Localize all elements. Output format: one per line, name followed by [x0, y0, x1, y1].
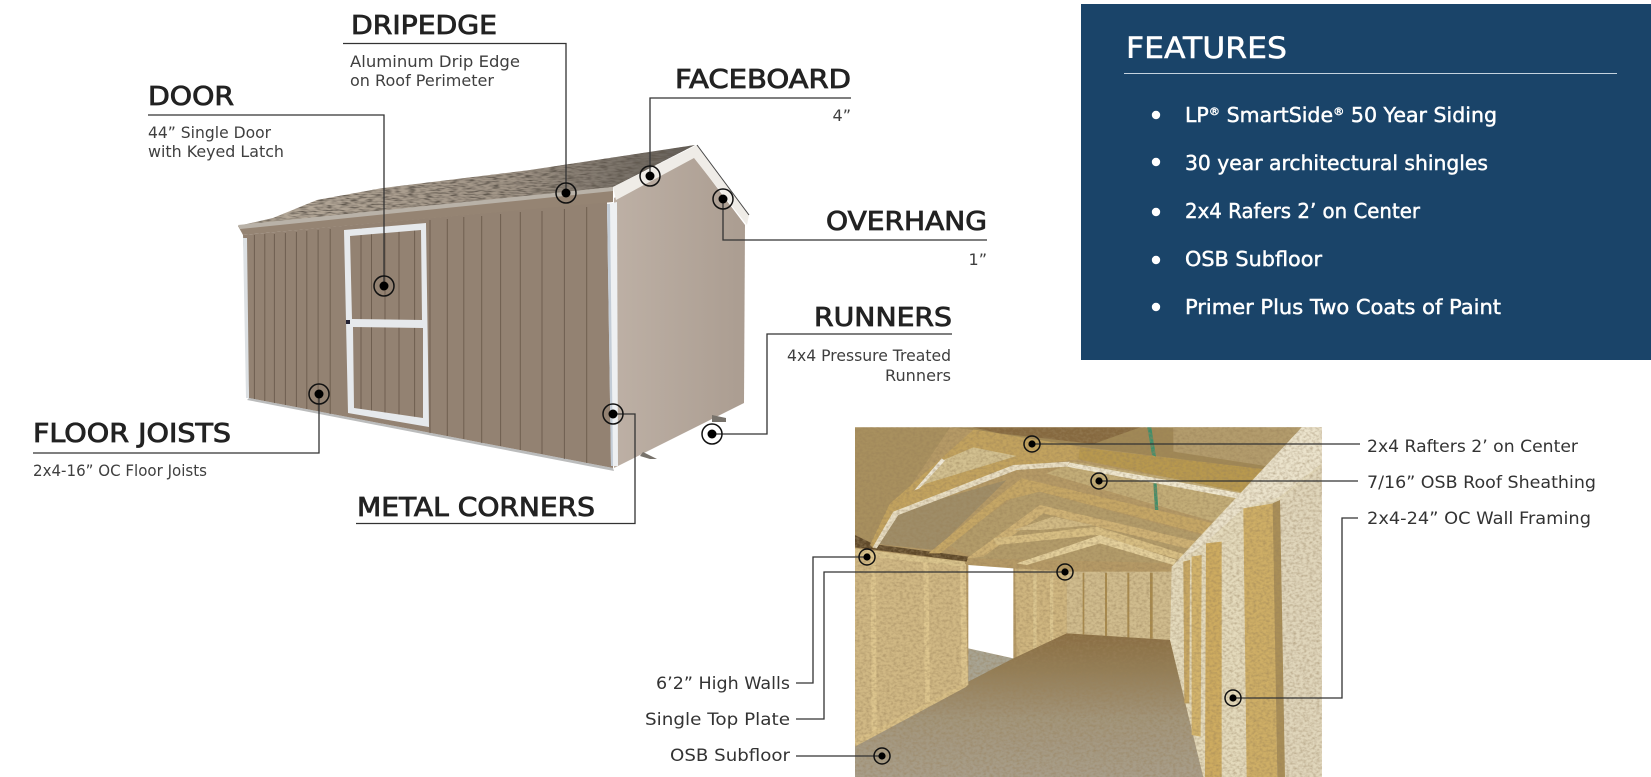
feature list: 50 Year Siding: [1344, 103, 1497, 127]
feature list: SmartSide: [1220, 103, 1333, 127]
photo callout: wall framing: 2x4-24” OC Wall Framing: [1367, 509, 1591, 529]
callout: floor joists: 2x4-16” OC Floor Joists: [33, 461, 207, 480]
callout: door: 44” Single Door: [148, 123, 271, 142]
feature list: ®: [1209, 105, 1220, 118]
corner and gable trim: [607, 202, 618, 466]
photo callout: wall framing: [1225, 509, 1591, 706]
left wall: [855, 548, 968, 745]
roof sheathing: [855, 427, 950, 545]
shed side wall: [614, 157, 745, 468]
photo callout: top plate: Single Top Plate: [645, 710, 790, 730]
callout: dripedge: [343, 11, 576, 203]
callout: door: with Keyed Latch: [148, 142, 284, 161]
photo callout: rafters: 2x4 Rafters 2’ on Center: [1367, 437, 1578, 457]
callout: runners: 4x4 Pressure Treated: [787, 346, 951, 365]
shed illustration: [238, 145, 749, 471]
callout: overhang: [713, 189, 987, 269]
callout: floor joists: [33, 384, 329, 480]
callout: runners: RUNNERS: [814, 303, 952, 333]
photo callout: high walls: 6’2” High Walls: [656, 674, 790, 694]
plank lines: [254, 207, 587, 463]
floor: [855, 633, 1203, 777]
shed front wall: [243, 202, 613, 468]
callout: floor joists: FLOOR JOISTS: [33, 419, 231, 449]
door trim: [344, 223, 429, 427]
shed roof shingles: [238, 145, 695, 226]
ground shadow: [247, 398, 614, 471]
callout: dripedge: on Roof Perimeter: [350, 71, 494, 90]
photo callout: roof sheathing: 7/16” OSB Roof Sheathing: [1367, 473, 1596, 493]
doorway opening: [968, 565, 1013, 658]
features heading: FEATURES: [1126, 31, 1287, 65]
photo callout: subfloor: OSB Subfloor: [670, 746, 790, 766]
feature list: 2x4 Rafers 2’ on Center: [1185, 199, 1421, 223]
interior photo: [855, 427, 1322, 777]
runners: [640, 452, 657, 459]
callout: faceboard: [640, 65, 851, 186]
photo callout: rafters: [1024, 436, 1578, 457]
rafters and trusses: [870, 429, 1265, 565]
photo callout: high walls: [656, 549, 875, 694]
callout: dripedge: Aluminum Drip Edge: [350, 52, 520, 71]
green strap: [1147, 427, 1156, 457]
photo callout: top plate: [645, 564, 1073, 730]
photo callout: roof sheathing: [1091, 473, 1596, 493]
feature list: 30 year architectural shingles: [1185, 151, 1488, 175]
feature list: OSB Subfloor: [1185, 247, 1323, 271]
callout: runners: [702, 303, 952, 444]
callout: door: [148, 82, 394, 296]
callout: overhang: OVERHANG: [826, 207, 987, 237]
far end wall: [1067, 572, 1172, 640]
callout: door: DOOR: [148, 82, 234, 112]
feature list: [1152, 103, 1501, 319]
callout: metal corners: METAL CORNERS: [357, 493, 595, 523]
callout: faceboard: FACEBOARD: [675, 65, 851, 95]
feature list: ®: [1333, 105, 1344, 118]
feature list: LP: [1185, 103, 1208, 127]
callout: metal corners: [356, 404, 635, 524]
feature list: Primer Plus Two Coats of Paint: [1185, 295, 1501, 319]
door latch: [346, 320, 350, 324]
fascia board: [238, 187, 613, 235]
callout: dripedge: DRIPEDGE: [351, 11, 497, 41]
left return wall: [1015, 568, 1067, 658]
callout: runners: Runners: [885, 366, 951, 385]
callout: faceboard: 4”: [833, 106, 851, 125]
photo callout: subfloor: [670, 746, 890, 766]
panel: features: [1081, 4, 1651, 360]
callout: overhang: 1”: [969, 250, 987, 269]
right wall and studs: [1170, 427, 1322, 777]
